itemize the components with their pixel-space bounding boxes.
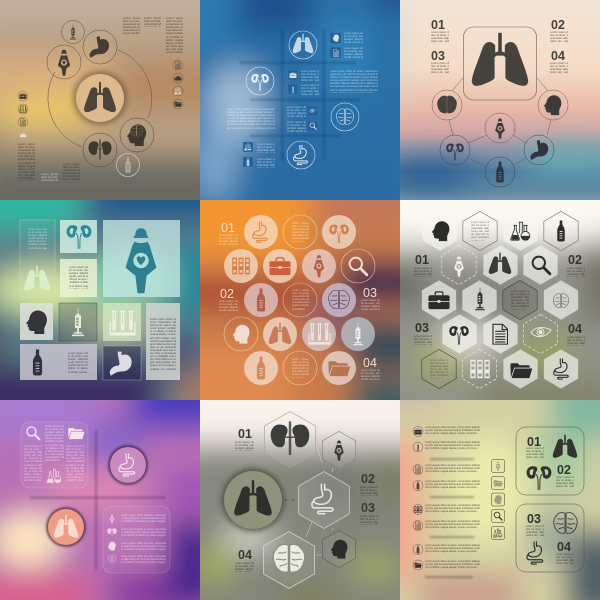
numbers: 04 [557,540,571,554]
numbers [220,221,377,370]
brain head node [120,118,154,152]
connector lines [449,78,551,166]
list text rows: Lorem ipsum dolor sit amet, consectetur adipiscing elit, sed do eiusmod tempor incididunt ut labore et dolore magna aliqua, ut enim ad minim [425,520,480,529]
list text rows: Lorem ipsum dolor sit amet, consectetur adipiscing elit, sed do eiusmod tempor incididunt ut labore et dolore magna aliqua, ut enim ad minim [425,504,480,513]
tile: head [20,303,53,340]
list text rows: Lorem ipsum dolor sit amet, consectetur adipiscing elit, sed do eiusmod tempor incididunt ut labore et dolore magna aliqua, ut enim ad minim [425,480,480,489]
numbers [238,427,375,562]
connectors [306,443,333,555]
numbers: 02 [568,253,582,267]
card text columns [24,425,84,482]
head circle [538,90,568,120]
text pair centre bottom [287,106,306,132]
syringe node [62,20,84,44]
woman hexagon [322,431,356,469]
panel: teal tile mosaic [0,200,200,400]
text pair bottom left [257,143,275,168]
card 03-04 [516,504,584,572]
background blur [370,170,600,430]
numbers: 03 [363,286,377,300]
woman circle [485,113,515,143]
card text columns: Lorem ipsum dolor sit amet, consectetur adipiscing elit, sed do eiusmod tempor incididunt ut labore et dolore magna aliqua, ut enim ad minim veniam, quis nostrud exercitation ullamco laboris [45,425,64,462]
background blur [0,0,235,235]
tile: syringe [59,303,97,341]
brain hexagon [264,532,314,588]
panel: blue grid diagram [200,0,400,200]
bottom-right card text: Lorem ipsum dolor sit amet, consectetur adipiscing elit, sed do eiusmod tempor incididunt ut labore et dolore magna [121,542,166,551]
numbers: 02 [220,287,234,301]
kidneys circle [246,67,274,95]
dashed hexagons [442,245,558,389]
pregnant woman node [47,45,81,79]
bottom-right card text [121,514,166,564]
centre icon column [492,460,504,540]
list text rows: Lorem ipsum dolor sit amet, consectetur adipiscing elit, sed do eiusmod tempor incididunt ut labore et dolore magna aliqua, ut enim ad minim [425,544,480,553]
text pair centre top [301,70,319,96]
panel: orange circle grid [200,200,400,400]
tile: text [60,259,97,297]
numbers: 01 [431,18,445,32]
white hexagons with icons [422,211,578,389]
kidneys hexagon [265,412,315,467]
tile: pregnant woman [103,220,180,297]
tile: text and lungs outline [20,220,55,297]
lungs badge [46,507,86,547]
list divider shadows [425,458,474,578]
panel: circular organ diagram on tan background [0,0,200,200]
kidneys circle [440,135,470,165]
numbers: 01 [238,427,252,441]
brain circle [432,90,462,120]
tile: test tubes [103,303,141,341]
bottom-right card text: Lorem ipsum dolor sit amet, consectetur adipiscing elit, sed do eiusmod tempor incididunt ut labore et dolore magna [121,555,166,564]
list text rows: Lorem ipsum dolor sit amet, consectetur adipiscing elit, sed do eiusmod tempor incididunt ut labore et dolore magna aliqua, ut enim ad minim [425,560,480,569]
tile: kidneys [60,220,97,253]
background blur [370,370,600,600]
tile: stomach [103,346,141,380]
numbers: 02 [361,472,375,486]
numbers: 04 [363,356,377,370]
text pair top right [344,32,363,58]
background blur [170,0,430,230]
left list icons [413,426,423,570]
list text rows: Lorem ipsum dolor sit amet, consectetur adipiscing elit, sed do eiusmod tempor incididunt ut labore et dolore magna aliqua, ut enim ad minim [425,441,480,450]
card 01-02 [516,427,584,495]
numbers [527,435,571,554]
numbers: 03 [361,501,375,515]
background tints [380,0,600,185]
lungs badge with shadow [222,469,284,531]
panel: hexagon organ network [200,400,400,600]
card text blocks [526,447,574,564]
bottom-right card text: Lorem ipsum dolor sit amet, consectetur adipiscing elit, sed do eiusmod tempor incididunt ut labore et dolore magna [121,528,166,537]
panel: hexagon honeycomb [400,200,600,400]
panel: pastel list and organ cards [400,400,600,600]
outlined hexagons [422,211,578,389]
small right icons [173,60,183,109]
list text rows [425,426,480,570]
hexagon icons [428,220,569,379]
numbers: 03 [431,49,445,63]
side text blocks [219,234,380,380]
connector dots [285,499,294,501]
circles row 5 [244,351,356,385]
list text rows: Lorem ipsum dolor sit amet, consectetur adipiscing elit, sed do eiusmod tempor incididunt ut labore et dolore magna aliqua, ut enim ad minim [425,464,480,473]
panel: purple quadrants [0,400,200,600]
top-left card [21,422,88,488]
circles row 2 [224,249,375,283]
bottle node [116,154,140,176]
background blur [170,170,430,430]
circles row 4 [224,317,375,351]
background blur [170,370,430,600]
grid lines [240,30,360,160]
kidneys node [83,133,117,167]
stomach hexagon [299,472,349,528]
lungs circle [289,31,317,59]
numbers: 01 [527,435,541,449]
brain circle [331,103,359,131]
numbers: 01 [221,221,235,235]
side text blocks [414,267,585,346]
numbers: 03 [527,512,541,526]
numbers [415,253,582,336]
bottom-right card [103,506,170,573]
numbers: 01 [415,253,429,267]
quadrant lines [30,430,165,570]
bottle circle [485,157,515,187]
small left icons [18,91,28,137]
stomach circle [287,141,315,169]
numbers: 04 [568,322,582,336]
tile: bottle and text: Lorem ipsum dolor sit amet, consectetur adipiscing elit, sed do eiusmod tempor incididunt ut labore et dolore magna [68,352,88,373]
tile: long text [146,303,180,380]
lungs box [464,27,536,100]
orbit ring [48,50,152,147]
numbers [431,18,565,63]
background gradient [395,0,600,205]
head hexagon [322,530,356,568]
stomach badge [108,445,148,485]
text in outline circles: Lorem ipsum dolor sit amet, consectetur adipiscing elit, sed do eiusmod tempor incididunt ut labore [292,289,309,311]
stomach node [83,30,117,64]
text inside hexagons [430,221,529,379]
tile: bottle and text [20,344,97,380]
panel: lungs with network of organ circles [400,0,600,200]
numbers: 04 [551,49,565,63]
numbers: 02 [557,463,571,477]
small square icons [243,32,341,167]
background blur [0,170,230,430]
bottom-right card text: Lorem ipsum dolor sit amet, consectetur adipiscing elit, sed do eiusmod tempor incididunt ut labore et dolore magna [121,514,166,523]
numbers: 04 [238,548,252,562]
text in outline circles [292,222,309,378]
list text rows: Lorem ipsum dolor sit amet, consectetur adipiscing elit, sed do eiusmod tempor incididunt ut labore et dolore magna aliqua, ut enim ad minim [425,426,480,435]
background blur [0,370,230,600]
numbers: 02 [551,18,565,32]
hub circle with lungs [73,71,127,125]
stomach circle [524,135,554,165]
circles row 1 [244,215,356,249]
circles row 3 [244,283,356,317]
numbers: 03 [415,321,429,335]
